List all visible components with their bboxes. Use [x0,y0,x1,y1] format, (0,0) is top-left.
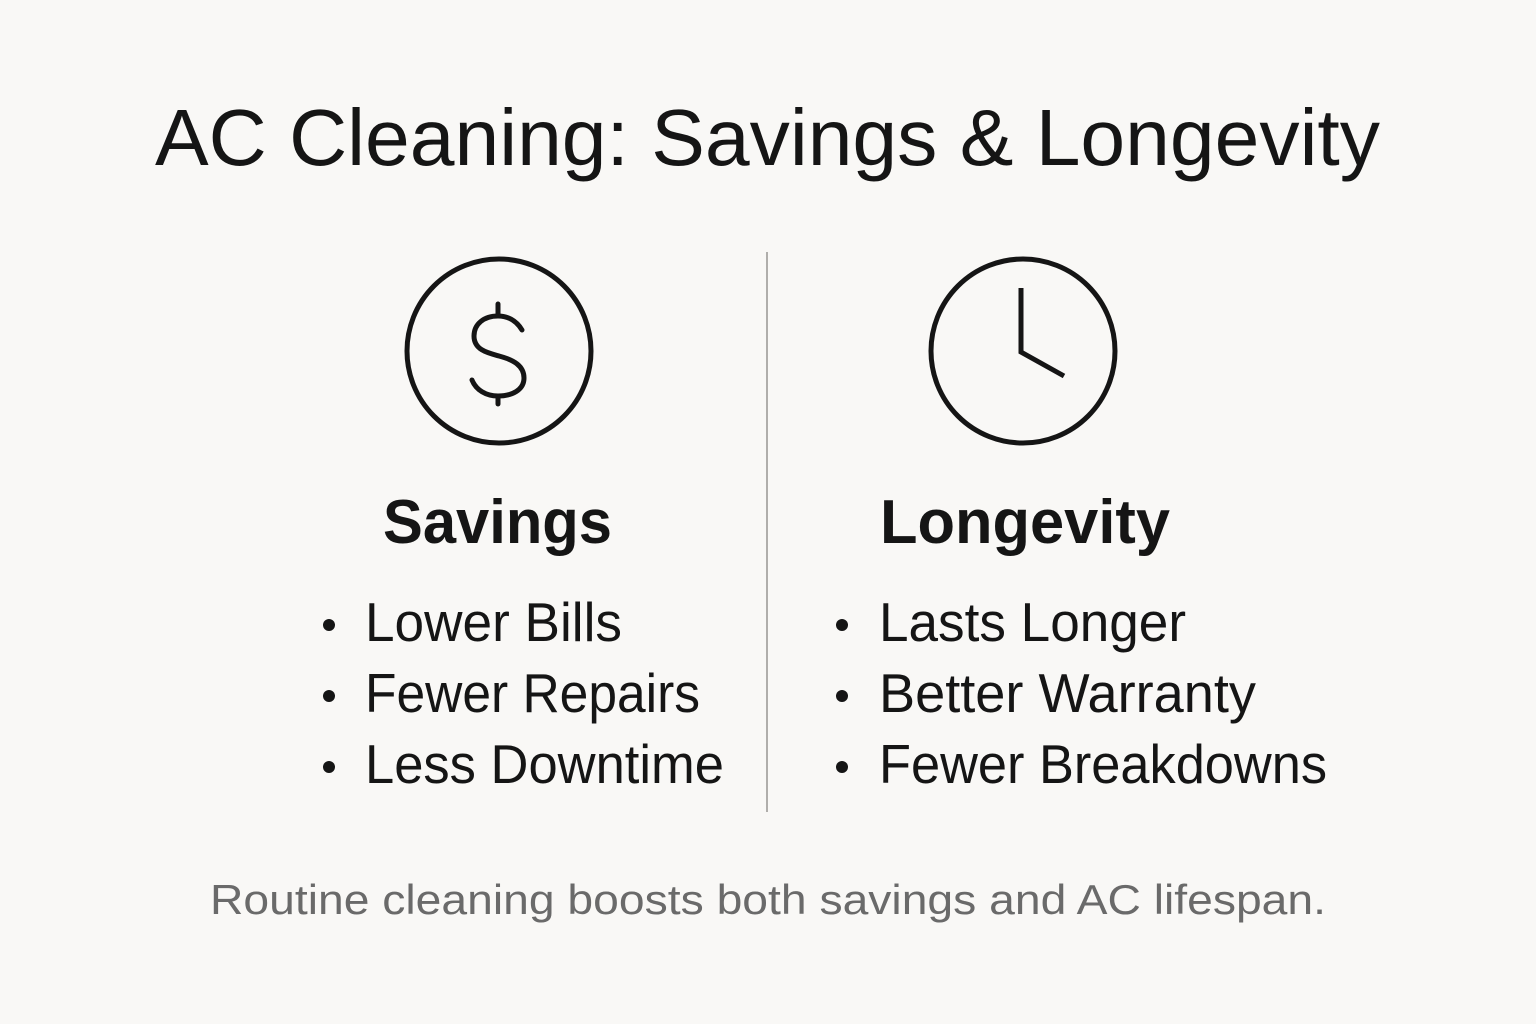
icon: clock [931,259,1115,443]
list: longevity benefits [836,591,1327,795]
list: savings benefits [323,591,724,795]
icon: dollar [407,259,591,443]
list: longevity benefits: Fewer Breakdowns [879,733,1327,795]
list: longevity benefits: Lasts Longer [879,591,1186,653]
list: savings benefits: Less Downtime [365,733,724,795]
title: AC Cleaning: Savings & Longevity [155,93,1380,182]
footer caption: Routine cleaning boosts both savings and AC lifespan. [210,876,1326,923]
list: savings benefits: Fewer Repairs [365,662,700,724]
list: savings benefits: Lower Bills [365,591,622,653]
panel: savings [323,259,724,795]
heading: longevity: Longevity [880,488,1171,557]
heading: savings: Savings [383,488,612,557]
list: longevity benefits: Better Warranty [879,662,1256,724]
panel: longevity [836,259,1327,795]
